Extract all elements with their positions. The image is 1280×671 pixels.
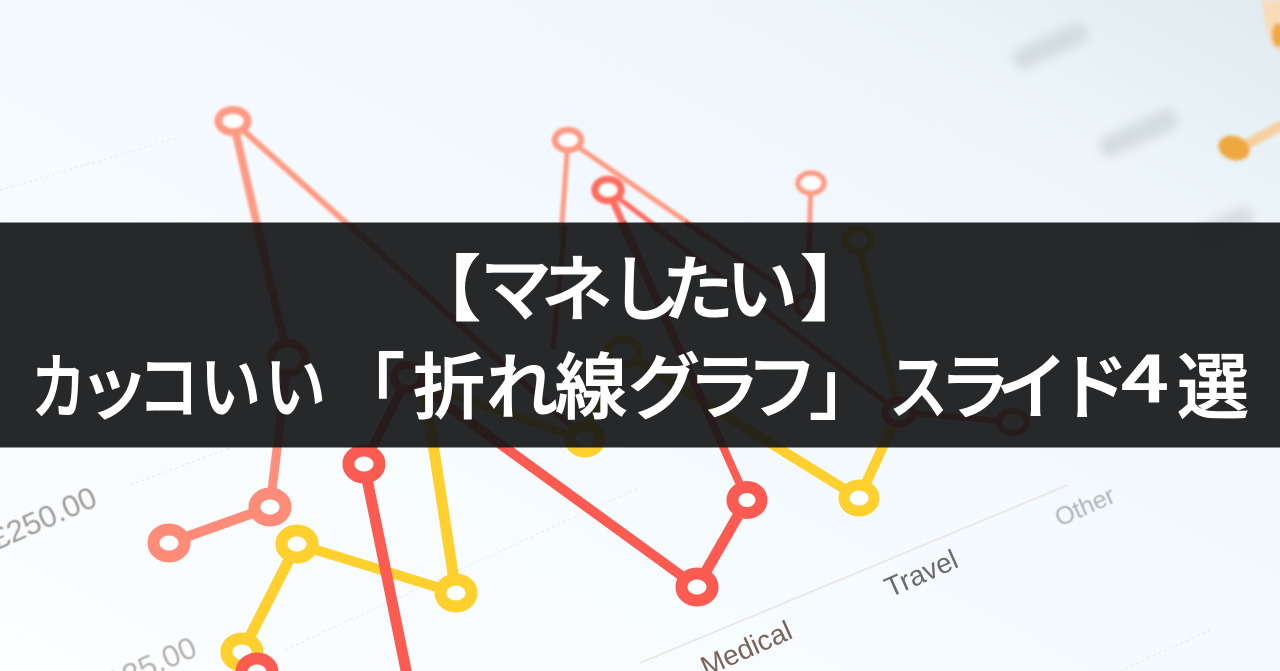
chart axes [0, 137, 1210, 671]
title line 2: ス [889, 330, 948, 434]
title line 2: カ [31, 331, 86, 434]
title line 2: コ [138, 330, 199, 434]
chart: upper thin series [553, 222, 1027, 433]
title line 2: ライド [939, 329, 1129, 434]
chart: red series [242, 222, 913, 671]
title line 2: い [200, 331, 261, 435]
title line 2 [31, 329, 1249, 435]
title line 2: 選 [1177, 329, 1249, 434]
title line 2: い [265, 331, 326, 435]
title line 2: 「折れ線グラフ」 [333, 329, 881, 434]
title band [0, 222, 1280, 448]
blurred axis labels, top right [1009, 20, 1257, 248]
chart: blurred far end of the lines [212, 104, 828, 240]
chart: yellow series [226, 229, 899, 666]
title line 2: 4 [1121, 329, 1169, 421]
chart: salmon series [154, 225, 570, 556]
axis label: Other: Other [1051, 481, 1119, 533]
title line 1: 【マネしたい】 [409, 251, 872, 331]
axis label: Travel: Travel [880, 544, 963, 603]
title [31, 251, 1249, 435]
chart: blurred orange series [1215, 0, 1280, 164]
title line 2: ッ [78, 329, 150, 434]
